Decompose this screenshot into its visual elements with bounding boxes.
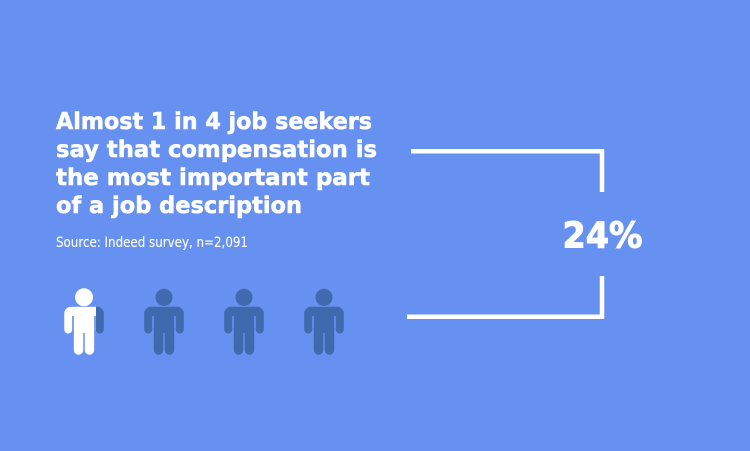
heading — [56, 109, 377, 219]
heading: Almost 1 in 4 job seekers — [56, 109, 372, 135]
heading: say that compensation is — [56, 137, 377, 163]
pictogram: 1 of 4 people highlighted — [64, 288, 344, 355]
infographic canvas — [56, 111, 642, 355]
heading: of a job description — [56, 193, 302, 219]
percentage value: 24% — [562, 216, 642, 256]
bracket: bottom — [407, 276, 602, 317]
bracket: top — [411, 151, 602, 192]
icon: person dark — [224, 289, 264, 355]
icon: person dark — [304, 289, 344, 355]
icon: person partly filled — [64, 288, 104, 355]
source note: Source: Indeed survey, n=2,091 — [56, 235, 248, 251]
heading: the most important part — [56, 165, 370, 191]
icon: person dark — [144, 289, 184, 355]
